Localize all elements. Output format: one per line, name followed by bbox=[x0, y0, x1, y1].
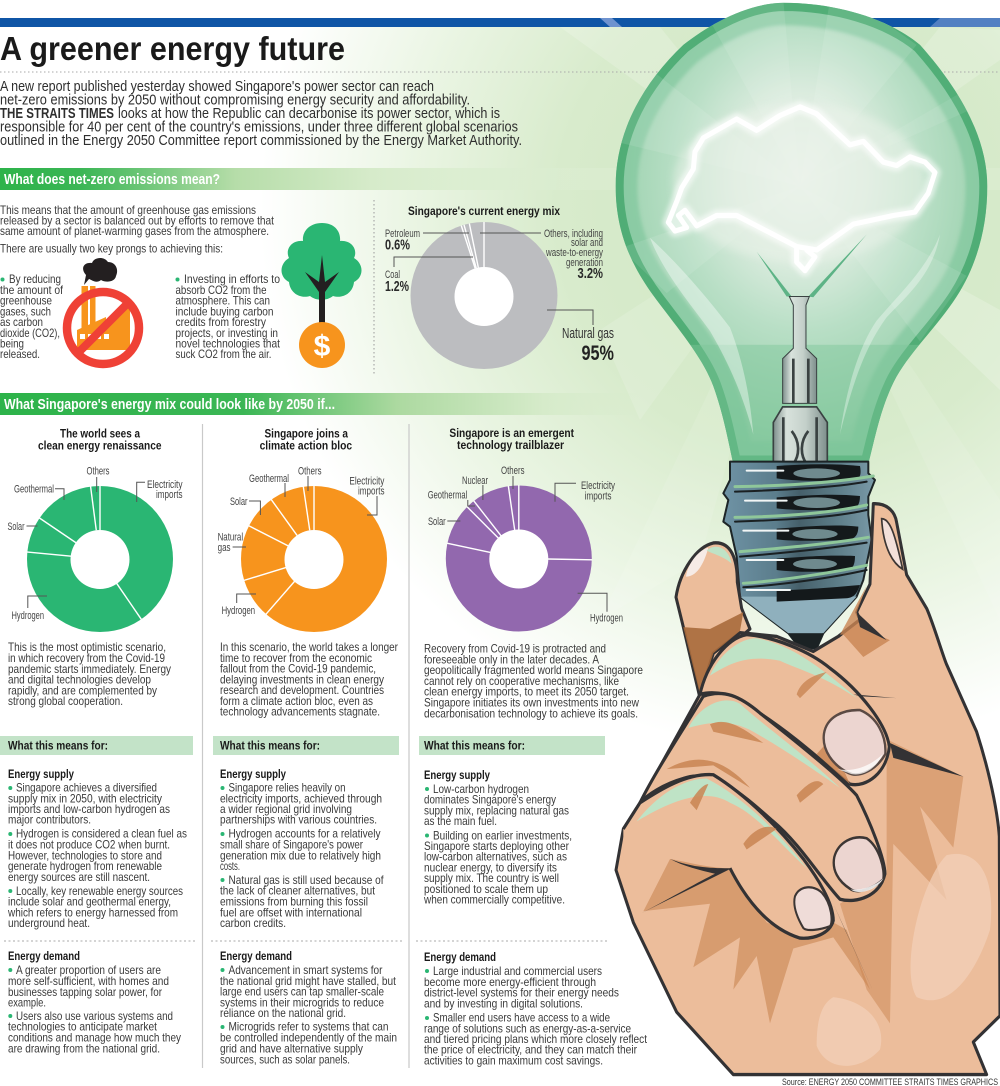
scenario 2 heading: Singapore joins a bbox=[264, 426, 348, 440]
scenario 1 description: pandemic starts immediately. Energy bbox=[8, 663, 171, 676]
chart: current energy mix bbox=[385, 204, 614, 369]
scenario 1 energy supply: However, technologies to store and bbox=[8, 849, 162, 862]
bulb support wires bbox=[757, 234, 867, 297]
bullet: reducing greenhouse gases: as carbon bbox=[0, 316, 43, 329]
scenario 1 energy supply: supply mix in 2050, with electricity bbox=[8, 792, 162, 805]
scenario 3 description: decarbonisation technology to achieve its goals. bbox=[424, 707, 638, 720]
illustration: hand holding bulb bbox=[616, 504, 1000, 1075]
net-zero explanation: There are usually two key prongs to achieving this: bbox=[0, 242, 223, 256]
finger 3 bbox=[623, 775, 833, 938]
scenario 3 description: cannot rely on cooperative mechanisms, like bbox=[424, 675, 619, 688]
scenario 2 energy supply: Singapore relies heavily on bbox=[228, 782, 346, 795]
filament shaped like Singapore bbox=[668, 107, 935, 271]
glass stem and metal mount bbox=[773, 297, 827, 464]
chart: current energy mix: generation bbox=[566, 257, 603, 269]
scenario 2 energy demand: Microgrids refer to systems that can bbox=[228, 1021, 388, 1034]
scenario 1 energy demand: technologies to anticipate market bbox=[8, 1021, 158, 1034]
donut chart: scenario 3: Others bbox=[501, 465, 525, 477]
title: A greener energy future bbox=[0, 30, 345, 67]
scenario 1 description: rapidly, and are complemented by bbox=[8, 684, 157, 697]
section bar: net-zero: What does net-zero emissions mean? bbox=[4, 171, 220, 188]
scenario 2 description: form a climate action bloc, even as bbox=[220, 695, 373, 708]
scenario 3 heading bbox=[449, 426, 574, 452]
section bar: net-zero bbox=[0, 168, 620, 190]
scenario 2 energy demand bbox=[220, 949, 397, 1066]
chart: current energy mix: Singapore's current energy mix bbox=[408, 204, 560, 218]
scenario 1 heading: clean energy renaissance bbox=[38, 438, 162, 452]
scenario 2 energy demand: the national grid might have stalled, but bbox=[220, 975, 397, 988]
donut chart: scenario 3: Nuclear bbox=[462, 475, 488, 487]
scenario 3 description: foreseeable only in the later decades. A bbox=[424, 653, 599, 666]
bullet: absorbing CO2: atmosphere. This can bbox=[176, 294, 270, 308]
scenario 3 energy demand: range of solutions such as energy-as-a-service bbox=[424, 1022, 631, 1035]
scenario 3 description: geopolitically fragmented world means Singapore bbox=[424, 664, 643, 677]
scenario 1 energy demand: A greater proportion of users are bbox=[16, 964, 161, 977]
finger 2 bbox=[640, 693, 885, 900]
scenario 1 energy supply: it does not produce CO2 when burnt. bbox=[8, 839, 170, 852]
chart: current energy mix: Petroleum bbox=[385, 228, 420, 240]
donut chart: scenario 2: Hydrogen bbox=[222, 605, 255, 617]
donut chart: scenario 3: Electricity bbox=[581, 480, 615, 492]
scenario 2 energy demand: sources, such as solar panels. bbox=[220, 1053, 350, 1066]
scenario 2 energy demand: systems in their microgrids to reduce bbox=[220, 996, 384, 1009]
bullet: reducing greenhouse gases: greenhouse bbox=[0, 294, 52, 308]
donut chart: scenario 3 bbox=[428, 465, 623, 632]
scenario 2 energy supply: Energy supply bbox=[220, 767, 286, 781]
scenario 3 energy demand: and tiered pricing plans which more closely reflect bbox=[424, 1033, 648, 1046]
scenario 3 description: Singapore initiates its own investments into new bbox=[424, 696, 640, 709]
scenario 2 energy supply: costs. bbox=[220, 860, 240, 873]
scenario 2 description: time to recover from the economic bbox=[220, 652, 372, 665]
chart: current energy mix: 95% bbox=[582, 342, 614, 365]
chart: current energy mix: Natural gas bbox=[562, 325, 614, 342]
intro text: A new report published yesterday showed Singapore's power sector can reach bbox=[0, 79, 434, 95]
scenario 2 energy supply: partnerships with various countries. bbox=[220, 814, 377, 827]
scenario 2 energy supply: carbon credits. bbox=[220, 917, 286, 930]
scenario 1 "what this means" bar bbox=[0, 736, 193, 755]
donut chart: scenario 2: imports bbox=[358, 486, 385, 498]
chart: current energy mix: waste-to-energy bbox=[545, 247, 603, 259]
bullet: reducing greenhouse gases: the amount of bbox=[0, 284, 64, 297]
donut chart: scenario 1: Solar bbox=[8, 521, 25, 533]
chart: current energy mix: Coal bbox=[385, 269, 400, 281]
intro text: looks at how the Republic can decarbonise its power sector, which is bbox=[118, 106, 500, 122]
scenario 1 energy demand: are drawing from the national grid. bbox=[8, 1042, 160, 1055]
donut chart: scenario 2 bbox=[218, 466, 387, 632]
scenario 3 energy demand: the price of electricity, and they can match their bbox=[424, 1044, 637, 1057]
net-zero explanation bbox=[0, 204, 275, 256]
scenario 1 energy supply bbox=[7, 767, 187, 930]
scenario 1 energy demand: businesses tapping solar power, for bbox=[8, 986, 162, 999]
donut chart: scenario 1: Geothermal bbox=[14, 484, 54, 496]
donut chart: scenario 1 bbox=[8, 466, 183, 632]
bullet: reducing greenhouse gases: being bbox=[0, 338, 24, 350]
icon: tree growing from coin bbox=[282, 223, 362, 368]
bullet: absorbing CO2: novel technologies that bbox=[176, 338, 281, 350]
scenario 3 energy supply bbox=[423, 768, 572, 907]
net-zero explanation: This means that the amount of greenhouse gas emissions bbox=[0, 204, 256, 217]
scenario 2 energy supply: a wider regional grid involving bbox=[220, 803, 352, 816]
scenario 2 description: fallout from the Covid-19 pandemic, bbox=[220, 663, 376, 676]
scenario 1 energy demand: conditions and manage how much they bbox=[8, 1031, 181, 1044]
column dividers bbox=[202, 424, 409, 1068]
scenario 3 energy supply: as the main fuel. bbox=[424, 815, 497, 828]
scenario 3 description: Recovery from Covid-19 is protracted and bbox=[424, 643, 606, 656]
bullet: absorbing CO2: credits from forestry bbox=[176, 316, 266, 329]
illustration: screw base of bulb bbox=[723, 462, 875, 648]
hand shadows bbox=[643, 586, 963, 1023]
scenario 1 energy demand bbox=[8, 949, 181, 1055]
scenario 3 energy supply: Building on earlier investments, bbox=[433, 829, 572, 842]
scenario 3 energy demand bbox=[424, 950, 648, 1067]
palm and thumb bbox=[616, 504, 1000, 1075]
bullet: absorbing CO2: suck CO2 from the air. bbox=[176, 348, 272, 361]
scenario 3 energy supply: dominates Singapore's energy bbox=[424, 794, 556, 807]
chart: current energy mix: 0.6% bbox=[385, 236, 410, 254]
scenario 2 energy demand: Energy demand bbox=[220, 949, 292, 963]
scenario 3 energy supply: when commercially competitive. bbox=[423, 894, 565, 907]
section bar: energy mix by 2050: What Singapore's energy mix could look like by 2050 if... bbox=[4, 396, 335, 413]
icon: tree growing from coin: $ bbox=[314, 330, 331, 363]
bullet: reducing greenhouse gases: dioxide (CO2), bbox=[0, 327, 60, 340]
bullet: reducing greenhouse gases: By reducing bbox=[9, 273, 61, 286]
chart: current energy mix: solar and bbox=[571, 237, 603, 249]
scenario 1 heading bbox=[38, 426, 162, 452]
scenario 1 description: and digital technologies develop bbox=[8, 674, 151, 687]
scenario 1 energy demand: Users also use various systems and bbox=[16, 1010, 173, 1023]
bullet: reducing greenhouse gases: gases, such bbox=[0, 306, 51, 318]
finger 1 bbox=[700, 635, 889, 785]
intro text: responsible for 40 per cent of the country's emissions, under three different global scenarios bbox=[0, 120, 518, 136]
scenario 1 energy supply: major contributors. bbox=[8, 814, 91, 827]
net-zero explanation: same amount of planet-warming gases from the atmosphere. bbox=[0, 225, 269, 238]
scenario 3 energy demand: and by investing in digital solutions. bbox=[424, 997, 583, 1010]
donut chart: scenario 3: imports bbox=[584, 490, 612, 502]
scenario 1 description: This is the most optimistic scenario, bbox=[8, 641, 166, 654]
scenario 3 energy demand: activities to gain maximum cost savings. bbox=[424, 1054, 603, 1067]
scenario 1 heading: The world sees a bbox=[60, 426, 140, 440]
background glow with rays bbox=[0, 27, 1000, 747]
scenario 2 energy supply: electricity imports, achieved through bbox=[220, 792, 382, 805]
scenario 2 energy demand: be controlled independently of the main bbox=[220, 1032, 397, 1045]
scenario 3 energy supply: low-carbon alternatives, such as bbox=[424, 851, 567, 864]
intro text: THE STRAITS TIMES bbox=[0, 106, 114, 122]
index finger behind the bulb bbox=[676, 543, 750, 698]
bullet: absorbing CO2 bbox=[176, 273, 281, 361]
scenario 1 "what this means" bar: What this means for: bbox=[8, 738, 108, 752]
donut chart: scenario 1: Others bbox=[86, 466, 110, 478]
scenario 2 description bbox=[220, 641, 398, 719]
dotted divider bbox=[373, 200, 375, 375]
scenario 3 energy demand: Large industrial and commercial users bbox=[433, 965, 602, 978]
scenario 3 description: clean energy imports, to meet its 2050 target. bbox=[424, 686, 629, 699]
scenario 2 energy supply: Natural gas is still used because of bbox=[228, 874, 384, 887]
scenario 1 energy supply: which refers to energy harnessed from bbox=[7, 906, 178, 919]
chart: current energy mix: 3.2% bbox=[578, 265, 603, 282]
scenario 1 energy supply: include solar and geothermal energy, bbox=[8, 896, 171, 909]
scenario 2 "what this means" bar bbox=[213, 736, 399, 755]
scenario 3 energy supply: supply mix, replacing natural gas bbox=[424, 804, 569, 817]
scenario 3 heading: Singapore is an emergent bbox=[449, 426, 574, 440]
scenario 2 description: technology advancements stagnate. bbox=[220, 706, 380, 719]
scenario 1 energy supply: Hydrogen is considered a clean fuel as bbox=[16, 828, 187, 841]
scenario 1 energy supply: Energy supply bbox=[8, 767, 74, 781]
scenario 3 energy supply: supply mix. The country is well bbox=[424, 872, 559, 885]
chart: current energy mix: Others, including bbox=[544, 228, 603, 240]
donut chart: scenario 3: Solar bbox=[428, 516, 446, 528]
scenario 2 energy supply: fuel are offset with international bbox=[220, 906, 362, 919]
bullet: absorbing CO2: absorb CO2 from the bbox=[176, 284, 266, 297]
donut chart: scenario 2: Natural bbox=[218, 532, 243, 544]
donut chart: scenario 1: imports bbox=[156, 489, 183, 501]
scenario 2 description: In this scenario, the world takes a longer bbox=[220, 641, 398, 654]
scenario 3 energy demand: Smaller end users have access to a wide bbox=[433, 1012, 610, 1025]
scenario 1 description: strong global cooperation. bbox=[8, 695, 123, 708]
donut chart: scenario 2: Others bbox=[298, 466, 322, 478]
donut chart: scenario 1: Electricity bbox=[147, 479, 183, 491]
scenario 3 "what this means" bar: What this means for: bbox=[424, 738, 525, 752]
bullet: reducing greenhouse gases bbox=[0, 273, 64, 361]
top blue band bbox=[0, 18, 1000, 27]
scenario 2 description: delaying investments in clean energy bbox=[220, 673, 384, 686]
scenario 2 energy supply: generation mix due to relatively high bbox=[220, 849, 381, 862]
scenario 1 energy supply: imports and low-carbon hydrogen as bbox=[8, 803, 170, 816]
scenario 2 energy supply: Hydrogen accounts for a relatively bbox=[228, 828, 381, 841]
scenario 3 energy supply: nuclear energy, to diversify its bbox=[424, 861, 557, 874]
donut chart: scenario 1: Hydrogen bbox=[12, 610, 44, 622]
scenario 3 energy supply: Energy supply bbox=[424, 768, 490, 782]
scenario 3 energy demand: district-level systems for their energy needs bbox=[424, 987, 619, 1000]
bullet: reducing greenhouse gases: released. bbox=[0, 348, 40, 361]
donut chart: scenario 2: Solar bbox=[230, 496, 248, 508]
thumb nail and fingertip nail bbox=[882, 519, 903, 569]
donut chart: scenario 3: Geothermal bbox=[428, 490, 467, 502]
scenario 3 "what this means" bar bbox=[419, 736, 605, 755]
scenario 2 energy demand: large end users can tap smaller-scale bbox=[220, 986, 384, 999]
creases and dark wedges bbox=[642, 612, 963, 992]
scenario 2 energy demand: grid and have alternative supply bbox=[220, 1042, 363, 1055]
bullet: absorbing CO2: Investing in efforts to bbox=[184, 273, 280, 286]
donut chart: scenario 2: Geothermal bbox=[249, 473, 289, 485]
scenario 1 description: in which recovery from the Covid-19 bbox=[8, 652, 165, 665]
intro text: outlined in the Energy 2050 Committee report commissioned by the Energy Market Authority. bbox=[0, 133, 522, 149]
scenario 2 heading: climate action bloc bbox=[260, 438, 352, 452]
scenario 2 energy supply bbox=[220, 767, 384, 930]
scenario 3 energy supply: Low-carbon hydrogen bbox=[433, 783, 529, 796]
donut chart: scenario 3: Hydrogen bbox=[590, 612, 623, 624]
chart: current energy mix: 1.2% bbox=[385, 278, 409, 295]
scenario 3 energy demand: Energy demand bbox=[424, 950, 496, 964]
section bar: energy mix by 2050 bbox=[0, 393, 640, 415]
scenario 3 heading: technology trailblazer bbox=[457, 438, 564, 452]
scenario 1 energy supply: Locally, key renewable energy sources bbox=[16, 885, 183, 898]
dotted rule under title bbox=[0, 71, 1000, 73]
intro text: net-zero emissions by 2050 without compromising energy security and affordability. bbox=[0, 92, 470, 108]
scenario 1 energy supply: underground heat. bbox=[8, 917, 90, 930]
illustration: light bulb bbox=[600, 0, 1000, 465]
scenario 2 energy demand: Advancement in smart systems for bbox=[228, 964, 383, 977]
donut chart: scenario 2: Electricity bbox=[349, 476, 385, 488]
scenario 1 energy demand: Energy demand bbox=[8, 949, 80, 963]
scenario 3 energy supply: Singapore starts deploying other bbox=[424, 840, 569, 853]
scenario 1 description bbox=[8, 641, 171, 708]
scenario 2 "what this means" bar: What this means for: bbox=[220, 738, 320, 752]
scenario 2 energy supply: emissions from burning this fossil bbox=[220, 896, 368, 909]
scenario 1 energy supply: generate hydrogen from renewable bbox=[8, 860, 162, 873]
scenario 1 energy demand: more self-sufficient, with homes and bbox=[8, 975, 169, 988]
scenario 2 energy supply: small share of Singapore's power bbox=[220, 839, 363, 852]
scenario 2 energy supply: the lack of cleaner alternatives, but bbox=[220, 885, 376, 898]
scenario 3 energy supply: positioned to scale them up bbox=[424, 883, 548, 896]
bullet: absorbing CO2: projects, or investing in bbox=[176, 327, 278, 340]
donut chart: scenario 2: gas bbox=[218, 542, 231, 554]
net-zero explanation: released by a sector is balanced out by efforts to remove that bbox=[0, 214, 275, 228]
scenario 2 energy demand: reliance on the national grid. bbox=[220, 1007, 346, 1020]
icon: factory with prohibition sign bbox=[67, 258, 139, 364]
scenario 2 heading bbox=[260, 426, 352, 452]
scenario 1 energy supply: energy sources are still nascent. bbox=[8, 871, 150, 884]
scenario 3 description bbox=[424, 643, 643, 720]
scenario 1 energy demand: example. bbox=[8, 996, 46, 1009]
scenario 1 energy supply: Singapore achieves a diversified bbox=[16, 782, 157, 795]
intro text bbox=[0, 79, 522, 149]
scenario 3 energy demand: become more energy-efficient through bbox=[424, 976, 596, 989]
scenario 2 description: research and development. Countries bbox=[220, 684, 384, 697]
highlights on palm bbox=[817, 854, 991, 1066]
bullet: absorbing CO2: include buying carbon bbox=[176, 306, 274, 318]
